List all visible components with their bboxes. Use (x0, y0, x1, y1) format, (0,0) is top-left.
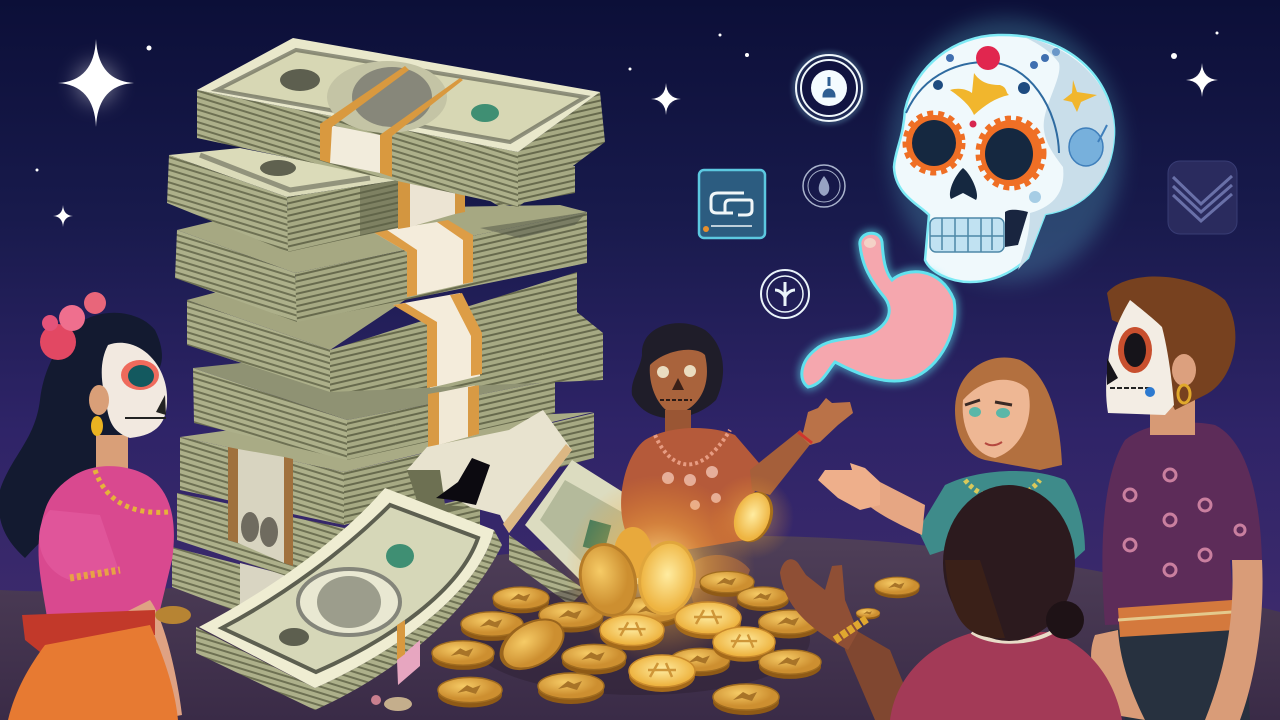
neck (1150, 395, 1195, 435)
stack 2 (175, 205, 587, 322)
stack 7 bottom (172, 547, 340, 650)
woman with sugar skull face paint, left (0, 292, 182, 720)
sleeve (39, 510, 118, 580)
hair bun (1046, 601, 1084, 639)
hair (955, 357, 1062, 470)
torn bills and fallen stack (196, 410, 686, 710)
hand (818, 463, 880, 510)
stars (36, 32, 1218, 227)
arms (1091, 630, 1145, 720)
maroon top (890, 632, 1122, 720)
collar (972, 632, 1052, 642)
belt (1118, 600, 1235, 637)
forehead gold (950, 73, 1009, 115)
head hair (943, 485, 1075, 641)
neck (96, 435, 128, 475)
arm (838, 620, 918, 720)
bracelet (835, 618, 868, 640)
face (650, 350, 707, 415)
woman with brown skin, orange blouse, centre (621, 323, 853, 625)
stack 6 lower (177, 493, 480, 595)
icon: small dim circle badge (803, 165, 845, 207)
forehead line (906, 62, 1059, 153)
woman with light brown hair, teal blouse (818, 357, 1085, 600)
necklace (95, 470, 168, 512)
man with sugar skull mask, right (1091, 277, 1263, 720)
teal blouse (918, 471, 1085, 600)
eye petals (905, 113, 1044, 188)
child from behind with raised hand (780, 485, 1122, 720)
icon: concentric circle badge (795, 54, 863, 122)
purple shirt (1102, 422, 1262, 625)
hair (1107, 277, 1235, 410)
cheek circle (1069, 128, 1103, 166)
arm (868, 482, 925, 535)
shirt swirls (1124, 469, 1245, 576)
hair (0, 313, 162, 558)
lower hand near coins (685, 555, 750, 625)
blouse (621, 428, 765, 555)
sugar skull (890, 18, 1122, 282)
belt (22, 610, 155, 660)
nose (950, 168, 977, 200)
stack 3 (187, 272, 603, 392)
skirt (8, 625, 178, 720)
hair (632, 323, 723, 418)
stack 1 second from top (167, 148, 575, 252)
eye left (906, 115, 962, 171)
money stacks tower (167, 38, 605, 650)
ear (1172, 354, 1196, 386)
neck (665, 410, 691, 440)
stack 5 with seal band (180, 412, 594, 566)
floating glowing coin (710, 475, 794, 559)
stack 4 (193, 360, 555, 460)
hand (802, 398, 853, 445)
flowers (40, 324, 76, 360)
pants (1110, 625, 1250, 720)
arm (750, 430, 812, 495)
jaw teeth (930, 218, 1004, 252)
eye right (980, 120, 1042, 186)
flowers on blouse (655, 430, 730, 464)
face (963, 380, 1030, 458)
ground (0, 536, 1280, 720)
blouse (39, 466, 174, 640)
coin on left ground (155, 606, 191, 624)
top red flower (976, 46, 1000, 70)
front big bill (196, 488, 502, 710)
icon: square teal pipes panel (699, 170, 765, 238)
debris on ground (371, 695, 412, 711)
mask (1106, 300, 1174, 415)
face skull paint (102, 343, 167, 438)
icon: dim wave square (1168, 161, 1237, 234)
arm (120, 600, 182, 720)
torn band paper (407, 410, 572, 533)
shaded side (1018, 37, 1114, 270)
forehead dots (933, 80, 943, 90)
back bill (509, 460, 686, 605)
icon: tree circle badge (761, 270, 809, 318)
stomach (802, 233, 955, 387)
coin pile (432, 475, 919, 715)
hand (780, 559, 858, 650)
side star (1063, 80, 1097, 112)
stack 0 top with hundred dollar bill (197, 38, 605, 207)
cranium and jaw (894, 35, 1114, 282)
